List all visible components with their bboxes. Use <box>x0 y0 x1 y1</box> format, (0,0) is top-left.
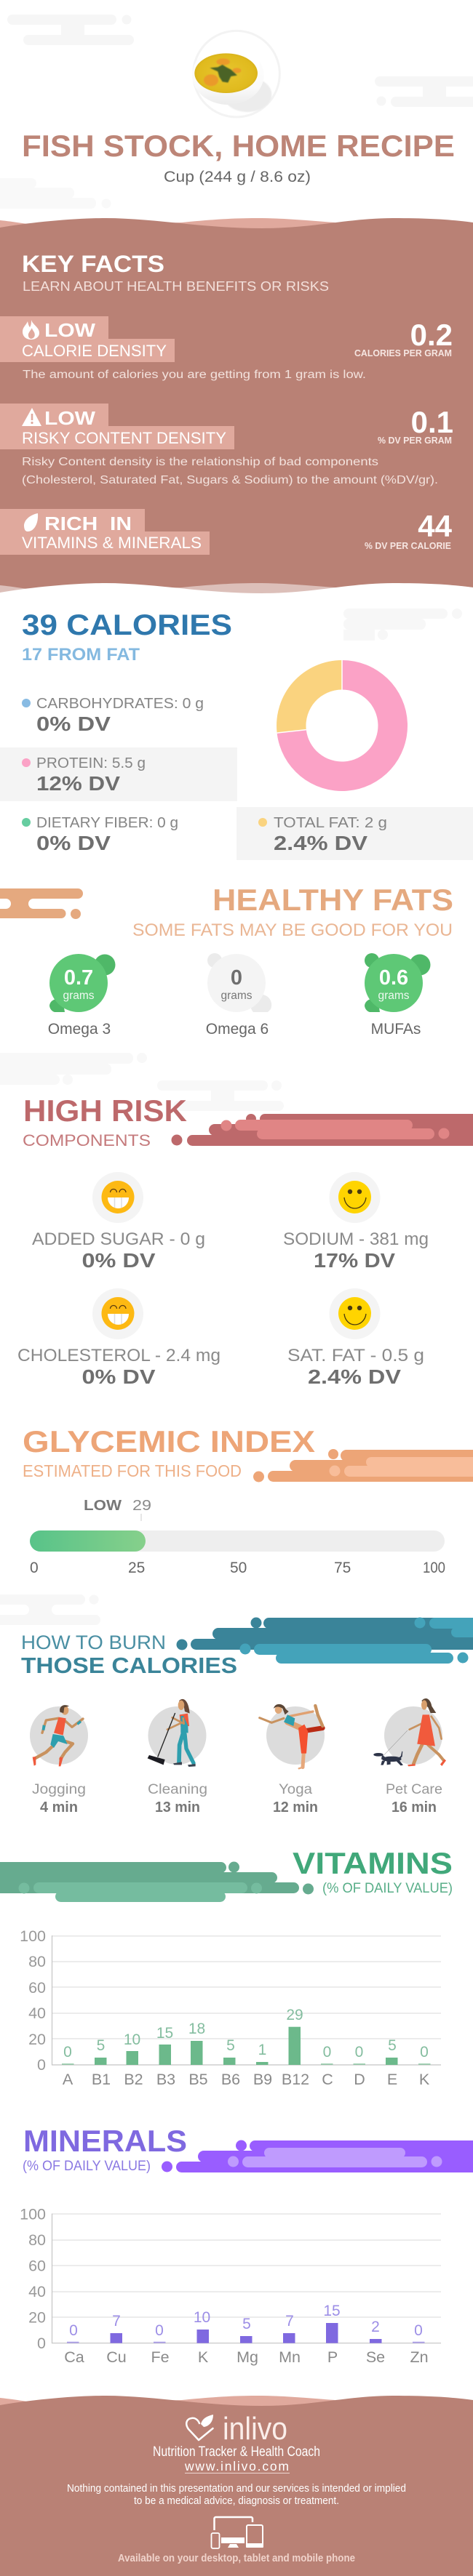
activity: yoga: 12 min <box>273 1799 318 1815</box>
bar chart: minerals: 80 <box>28 2231 46 2249</box>
figure: cleaner <box>148 1699 196 1767</box>
panel: healthy fats <box>0 883 453 1038</box>
fat: omega 6: Omega 6 <box>206 1021 269 1038</box>
gauge scale: 75 <box>334 1560 351 1576</box>
tagline: Nutrition Tracker & Health Coach <box>153 2444 320 2460</box>
gauge scale: 100 <box>423 1560 445 1576</box>
bar chart: minerals: 7 <box>285 2313 294 2330</box>
bar chart: vitamins: 10 <box>124 2031 140 2048</box>
disclaimer: Nothing contained in this presentation and our services is intended or implied <box>67 2483 406 2495</box>
bar chart: vitamins: B6 <box>221 2071 240 2088</box>
fat: omega 6: 0 <box>231 966 242 990</box>
bar chart: vitamins: 18 <box>188 2021 205 2037</box>
label: LOW <box>44 319 96 341</box>
unit: % DV PER CALORIE <box>365 541 451 551</box>
band wave <box>0 218 473 607</box>
bar chart: vitamins: A <box>63 2071 73 2088</box>
panel: minerals <box>20 2124 473 2366</box>
bar chart: minerals: 0 <box>414 2322 423 2339</box>
disclaimer: to be a medical advice, diagnosis or treatment. <box>134 2495 339 2507</box>
bar chart: vitamins: E <box>387 2071 397 2088</box>
value: 0.2 <box>410 318 453 352</box>
fat: omega 6: grams <box>220 990 253 1002</box>
background cloud top left <box>7 15 134 45</box>
icon: smile face <box>338 1181 371 1213</box>
background cloud top right <box>375 76 473 107</box>
nutrient: carbohydrates: CARBOHYDRATES: 0 g <box>36 696 204 712</box>
bar chart: vitamins: B1 <box>92 2071 111 2088</box>
bar chart: vitamins: B9 <box>253 2071 272 2088</box>
background cloud left mid <box>0 1053 147 1085</box>
item: sodium: 17% DV <box>314 1249 396 1272</box>
bar chart: vitamins: 0 <box>37 2056 46 2074</box>
icon: smile face <box>338 1297 371 1330</box>
bar chart: minerals: 0 <box>37 2335 46 2352</box>
bar chart: minerals: Se <box>366 2348 385 2366</box>
icon: grin face <box>102 1297 134 1330</box>
serving size: Cup (244 g / 8.6 oz) <box>164 169 311 185</box>
panel: high risk components <box>17 1094 473 1388</box>
nutrient: protein: 12% DV <box>36 772 121 795</box>
background cloud calories <box>343 609 462 641</box>
activity: jogging: Jogging <box>32 1782 86 1797</box>
decoration: green bars <box>0 1861 314 1902</box>
bar chart: vitamins: 0 <box>323 2044 331 2061</box>
bar chart: minerals: 0 <box>155 2322 164 2339</box>
title: FISH STOCK, HOME RECIPE <box>22 129 455 163</box>
decoration: orange bars <box>253 1449 473 1482</box>
bar chart: vitamins: B3 <box>156 2071 175 2088</box>
label: RICH IN <box>44 513 132 534</box>
item: saturated fat: SAT. FAT - 0.5 g <box>287 1346 424 1365</box>
description <box>22 456 438 486</box>
bar chart: vitamins: 15 <box>156 2025 173 2042</box>
label: LOW <box>44 407 96 429</box>
activity: jogging: 4 min <box>40 1799 78 1815</box>
description: (Cholesterol, Saturated Fat, Sugars & Sodium) to the amount (%DV/gr). <box>22 474 438 486</box>
item: saturated fat: 2.4% DV <box>308 1365 402 1388</box>
fat: omega 3: 0.7 <box>64 966 93 990</box>
disclaimer <box>67 2483 406 2507</box>
fat: MUFAs <box>365 953 431 1038</box>
fat: omega 3: Omega 3 <box>48 1021 111 1038</box>
bar chart: vitamins: B2 <box>124 2071 143 2088</box>
nutrient: carbohydrates <box>22 696 204 735</box>
item: sodium <box>283 1172 429 1272</box>
heading: GLYCEMIC INDEX <box>23 1424 315 1458</box>
subheading: SOME FATS MAY BE GOOD FOR YOU <box>132 920 453 940</box>
website link: www.inlivo.com <box>184 2459 289 2473</box>
bar chart: minerals: 40 <box>28 2283 46 2300</box>
fact: risky content density <box>0 404 453 486</box>
bar chart: vitamins: D <box>354 2071 365 2088</box>
background cloud behind high risk <box>157 1080 284 1111</box>
bar chart: minerals: Ca <box>64 2348 84 2366</box>
figure: dog walker <box>373 1698 446 1766</box>
activity: cleaning <box>148 1699 207 1815</box>
bar chart: vitamins: 60 <box>28 1979 46 1997</box>
icon: flame <box>23 320 39 340</box>
bar chart: vitamins: 5 <box>97 2037 105 2054</box>
fat: MUFAs: MUFAs <box>371 1021 421 1038</box>
donut chart <box>277 660 408 791</box>
subheading: (% OF DAILY VALUE) <box>322 1881 453 1896</box>
unit: CALORIES PER GRAM <box>354 348 452 358</box>
item: added sugar: 0% DV <box>82 1249 156 1272</box>
bar chart: minerals: 5 <box>242 2316 251 2332</box>
description: The amount of calories you are getting from 1 gram is low. <box>23 369 366 381</box>
gauge label <box>84 1498 151 1521</box>
row highlight fat <box>236 807 473 860</box>
heading: VITAMINS <box>293 1846 453 1880</box>
fat: omega 3 <box>48 954 115 1038</box>
fat: omega 6 <box>206 953 271 1038</box>
decoration: red bars <box>172 1114 473 1146</box>
decoration: teal bars <box>176 1617 473 1664</box>
nutrient: carbohydrates: 0% DV <box>36 713 111 735</box>
bar chart: vitamins: B5 <box>188 2071 208 2088</box>
gauge scale <box>30 1560 445 1576</box>
label: VITAMINS & MINERALS <box>22 534 202 552</box>
bar chart: minerals: 15 <box>323 2303 341 2319</box>
activity: pet care <box>373 1698 446 1815</box>
panel: glycemic index <box>23 1424 473 1576</box>
bar chart: minerals: 20 <box>28 2309 46 2327</box>
activity: yoga <box>260 1704 325 1815</box>
panel: footer <box>0 2396 473 2576</box>
subheading: ESTIMATED FOR THIS FOOD <box>23 1461 242 1480</box>
icon: leaf <box>24 513 38 531</box>
value: 44 <box>418 509 453 543</box>
activity: pet care: Pet Care <box>386 1782 442 1797</box>
background cloud left <box>0 1594 100 1625</box>
panel: vitamins <box>0 1846 453 2088</box>
bar chart: vitamins <box>20 1927 441 2088</box>
heading line 2: THOSE CALORIES <box>21 1653 237 1678</box>
nutrient: dietary fiber: DIETARY FIBER: 0 g <box>36 815 178 831</box>
heading: HIGH RISK <box>23 1094 187 1128</box>
gauge label: LOW <box>84 1498 122 1514</box>
bar chart: minerals <box>20 2206 441 2366</box>
bar chart: vitamins: B12 <box>282 2071 309 2088</box>
bar chart: minerals: 60 <box>28 2257 46 2274</box>
item: sodium: SODIUM - 381 mg <box>283 1229 429 1249</box>
nutrient: protein <box>22 755 146 795</box>
figure: jogger <box>33 1705 83 1766</box>
bar chart: vitamins: 5 <box>388 2037 397 2054</box>
fact: vitamins and minerals <box>0 509 453 555</box>
figure: yoga pose <box>260 1704 322 1768</box>
bar chart: minerals: Zn <box>410 2348 429 2366</box>
heading: MINERALS <box>23 2124 187 2158</box>
bar chart: vitamins: 100 <box>20 1927 46 1945</box>
logo: heart <box>186 2415 213 2440</box>
bar chart: minerals: P <box>327 2348 338 2366</box>
label: RISKY CONTENT DENSITY <box>22 429 226 447</box>
heading: KEY FACTS <box>22 251 164 277</box>
bar chart: minerals: Fe <box>151 2348 170 2366</box>
gauge scale: 25 <box>128 1560 145 1576</box>
bar chart: minerals: 100 <box>20 2206 46 2223</box>
nutrient: dietary fiber: 0% DV <box>36 832 111 854</box>
bar chart: vitamins: 1 <box>258 2042 266 2058</box>
bar chart: vitamins: K <box>419 2071 430 2088</box>
row highlight protein <box>0 747 237 801</box>
bar chart: minerals: Mg <box>236 2348 258 2366</box>
footer wave <box>0 2396 473 2576</box>
activity: cleaning: Cleaning <box>148 1782 207 1797</box>
item: cholesterol: 0% DV <box>82 1365 156 1388</box>
description: Risky Content density is the relationship of bad components <box>22 456 378 468</box>
item: cholesterol: CHOLESTEROL - 2.4 mg <box>17 1346 220 1365</box>
bar chart: minerals: K <box>198 2348 209 2366</box>
nutrient: total fat: 2.4% DV <box>274 832 368 854</box>
panel: key facts <box>0 218 473 607</box>
bar chart: vitamins: 0 <box>63 2044 72 2061</box>
bar chart: vitamins: 40 <box>28 2005 46 2022</box>
nutrient: total fat <box>258 815 387 854</box>
activity: pet care: 16 min <box>391 1799 437 1815</box>
panel: how to burn calories <box>21 1617 473 1815</box>
bar chart: vitamins: 0 <box>355 2044 363 2061</box>
subheading: LEARN ABOUT HEALTH BENEFITS OR RISKS <box>23 279 329 294</box>
bar chart: vitamins: 0 <box>420 2044 429 2061</box>
icon: grin face <box>102 1181 134 1213</box>
subheading: COMPONENTS <box>23 1131 151 1149</box>
bar chart: minerals: 0 <box>69 2322 78 2339</box>
heading line 1: HOW TO BURN <box>21 1632 166 1653</box>
bar chart: minerals: Mn <box>279 2348 301 2366</box>
food image: bowl of soup <box>192 31 279 117</box>
activity: jogging <box>30 1705 88 1815</box>
value: 0.1 <box>411 405 453 439</box>
subheading: 17 FROM FAT <box>22 645 140 665</box>
decoration: purple bars <box>162 2140 473 2172</box>
icon: devices <box>211 2517 263 2548</box>
fat: MUFAs: 0.6 <box>379 966 408 990</box>
nutrient: total fat: TOTAL FAT: 2 g <box>274 815 387 831</box>
logo: wordmark: inlivo <box>223 2411 287 2447</box>
heading: 39 CALORIES <box>22 609 232 641</box>
activity: cleaning: 13 min <box>155 1799 200 1815</box>
bar chart: vitamins: 20 <box>28 2031 46 2048</box>
item: saturated fat <box>287 1288 424 1388</box>
gauge label: 29 <box>132 1498 151 1514</box>
panel: calories <box>0 609 473 860</box>
unit: % DV PER GRAM <box>378 436 452 446</box>
bar chart: vitamins: 80 <box>28 1953 46 1970</box>
background cloud left <box>0 178 111 209</box>
gauge scale: 50 <box>230 1560 247 1576</box>
heading: HEALTHY FATS <box>212 883 453 917</box>
bar chart: minerals: 2 <box>371 2319 380 2335</box>
availability note: Available on your desktop, tablet and mobile phone <box>118 2552 355 2564</box>
item: added sugar: ADDED SUGAR - 0 g <box>32 1229 205 1249</box>
label: CALORIE DENSITY <box>22 342 167 360</box>
fat: MUFAs: grams <box>378 990 410 1002</box>
item: added sugar <box>32 1172 205 1272</box>
bar chart: vitamins: 29 <box>286 2007 303 2023</box>
decoration: orange bars <box>0 888 83 919</box>
bar chart: minerals: Cu <box>106 2348 127 2366</box>
activity: yoga: Yoga <box>279 1782 312 1797</box>
bar chart: vitamins: 5 <box>226 2037 235 2054</box>
nutrient: protein: PROTEIN: 5.5 g <box>36 755 146 771</box>
bar chart: minerals: 7 <box>112 2313 121 2330</box>
gauge bar <box>30 1530 445 1552</box>
bar chart: minerals: 10 <box>194 2309 210 2326</box>
fact: calorie density <box>0 316 453 381</box>
item: cholesterol <box>17 1288 220 1388</box>
icon: warning triangle <box>22 408 41 426</box>
gauge scale: 0 <box>30 1560 39 1576</box>
nutrient: dietary fiber <box>22 815 178 854</box>
bar chart: vitamins: C <box>322 2071 333 2088</box>
fat: omega 3: grams <box>63 990 95 1002</box>
subheading: (% OF DAILY VALUE) <box>23 2159 151 2174</box>
